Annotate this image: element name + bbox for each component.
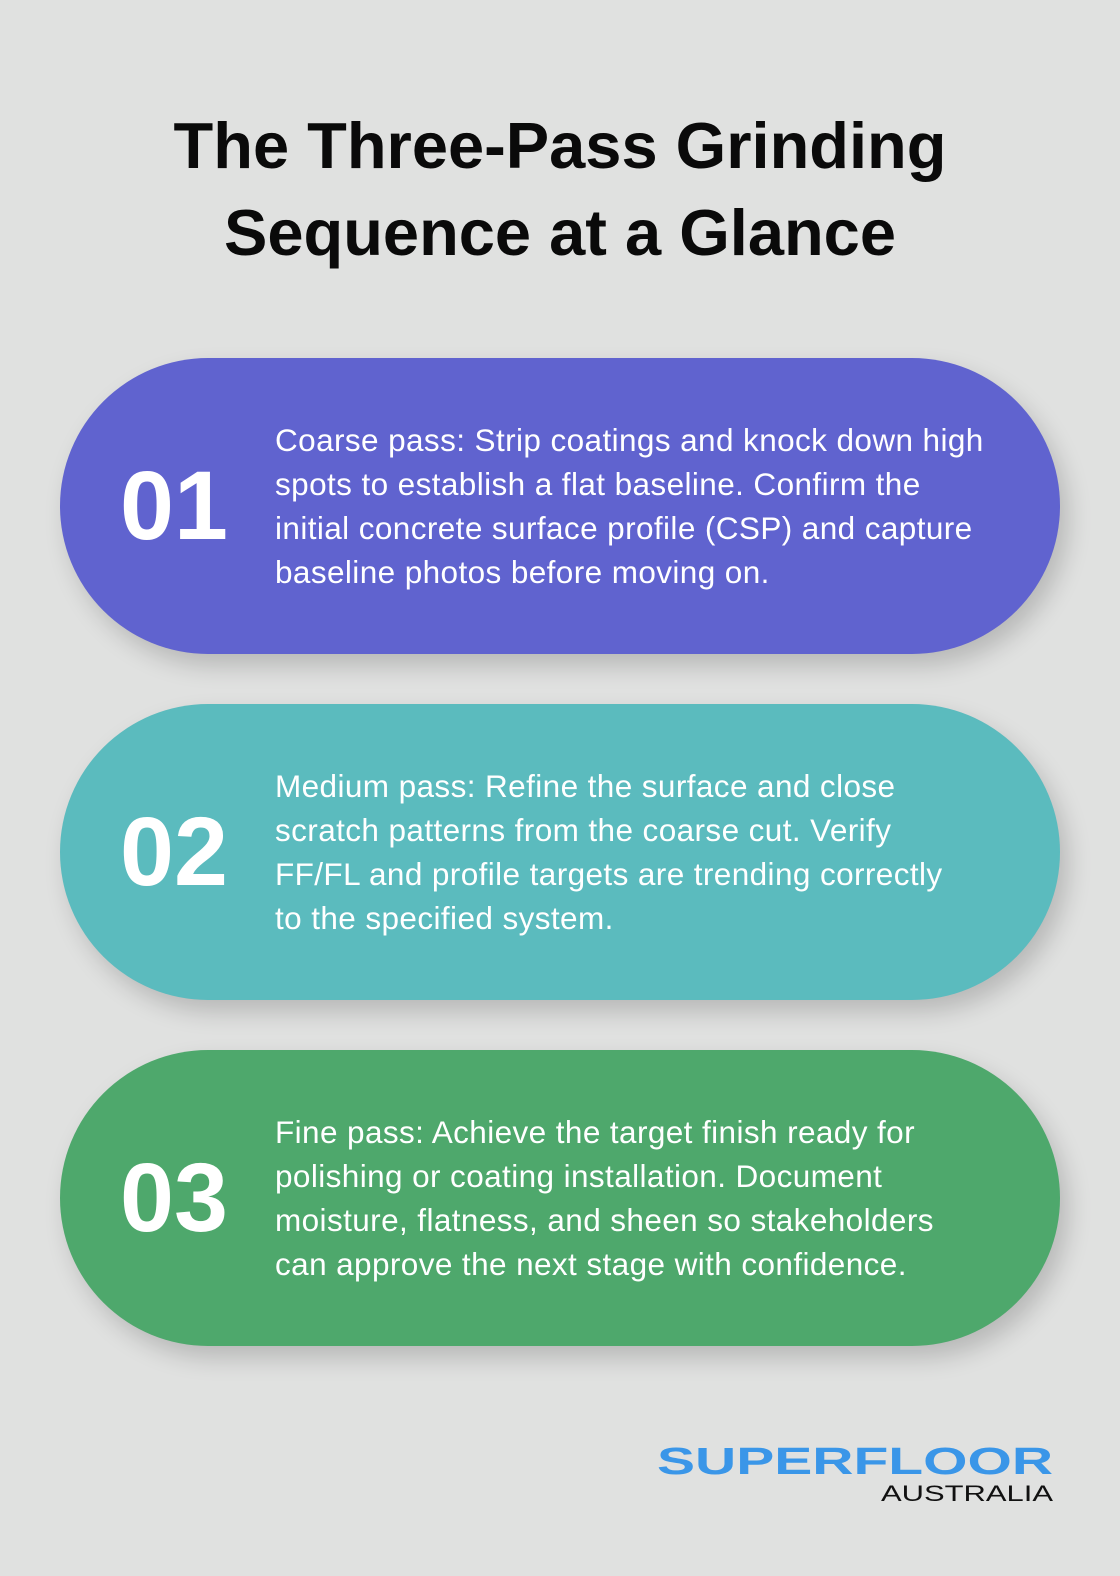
text: coarse pass: baseline photos before moving on.: [275, 554, 770, 590]
text: medium pass: scratch patterns from the coarse cut. Verify: [275, 812, 891, 848]
panel: step 02: [60, 704, 1060, 1000]
logo: [657, 1441, 1053, 1506]
panel: step 03: [60, 1050, 1060, 1346]
text: fine pass: moisture, flatness, and sheen so stakeholders: [275, 1202, 934, 1238]
number 03: 03: [120, 1143, 228, 1252]
text: medium pass: Medium pass: Refine the surface and close: [275, 768, 895, 804]
number 01: 01: [120, 451, 228, 560]
panel: step 01: [60, 358, 1060, 654]
text: coarse pass: initial concrete surface profile (CSP) and capture: [275, 510, 973, 546]
text: coarse pass: [275, 422, 984, 590]
text: medium pass: [275, 768, 943, 936]
logo: AUSTRALIA: [881, 1481, 1053, 1506]
text: fine pass: can approve the next stage with confidence.: [275, 1246, 907, 1282]
title: Sequence at a Glance: [224, 196, 896, 269]
text: coarse pass: spots to establish a flat baseline. Confirm the: [275, 466, 921, 502]
title: The Three-Pass Grinding: [174, 109, 946, 182]
text: fine pass: polishing or coating installation. Document: [275, 1158, 882, 1194]
text: fine pass: Fine pass: Achieve the target finish ready for: [275, 1114, 915, 1150]
title: [174, 109, 946, 269]
logo: SUPERFLOOR: [657, 1441, 1053, 1483]
number 02: 02: [120, 797, 228, 906]
text: fine pass: [275, 1114, 934, 1282]
text: medium pass: FF/FL and profile targets are trending correctly: [275, 856, 943, 892]
text: coarse pass: Coarse pass: Strip coatings and knock down high: [275, 422, 984, 458]
text: medium pass: to the specified system.: [275, 900, 614, 936]
